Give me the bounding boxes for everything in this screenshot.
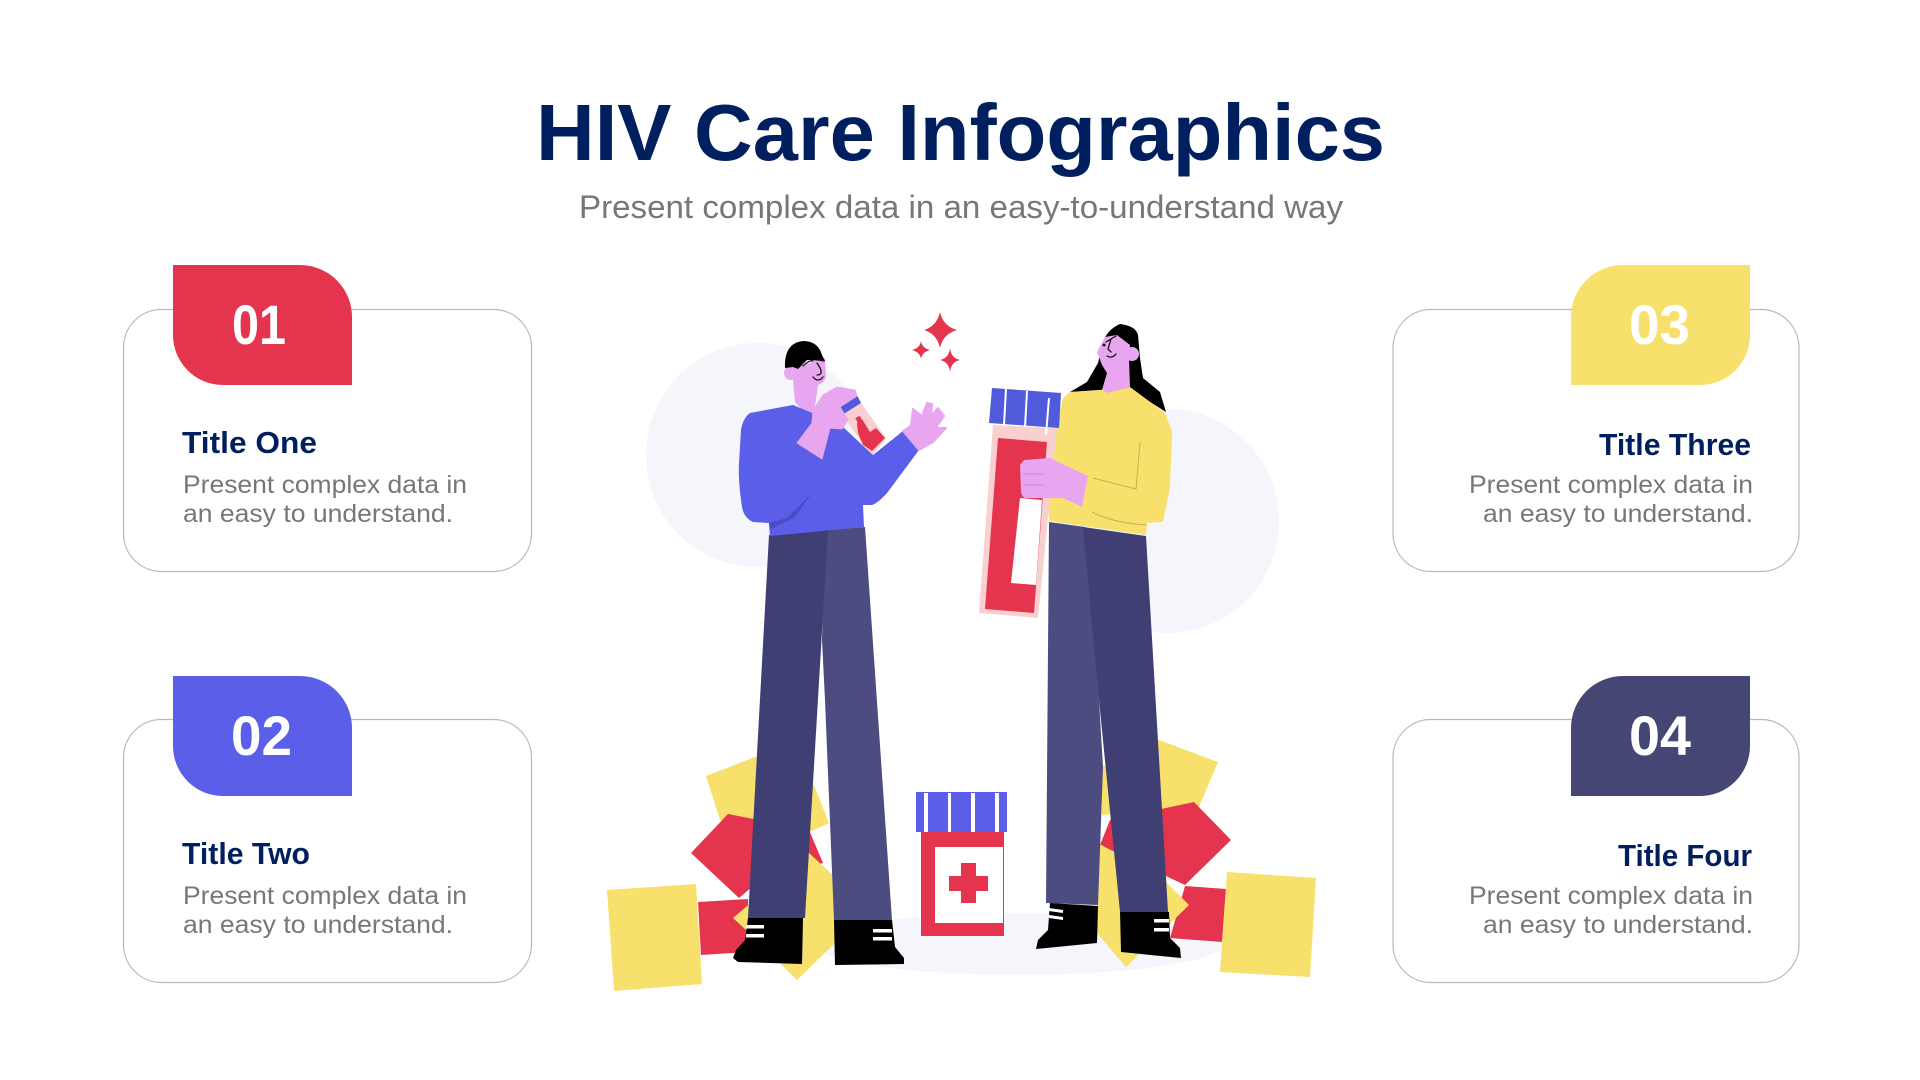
badge 01: [173, 265, 352, 385]
woman figure: [979, 324, 1181, 958]
woman hand finger lines: [1023, 474, 1045, 485]
number 04: 04: [1629, 704, 1691, 767]
woman shoes: [1036, 903, 1181, 958]
man blue sweater: [739, 405, 919, 536]
text block: card four: Present complex data in: [1469, 882, 1753, 910]
badge 04: [1571, 676, 1750, 796]
heading: title three: Title Three: [1599, 427, 1751, 462]
man sweater fold shadow: [769, 493, 812, 530]
woman yellow sweater: [1048, 387, 1172, 535]
text block: card one: an easy to understand.: [183, 500, 453, 528]
heading: title four: Title Four: [1618, 838, 1752, 873]
background blobs: [646, 343, 1279, 975]
man raised hand: [903, 403, 946, 450]
panel: card three: [1393, 265, 1799, 572]
right pile of papers: [1097, 740, 1316, 977]
woman neck and face: [1097, 335, 1139, 393]
heading: title one: Title One: [182, 425, 317, 460]
text block: card one: Present complex data in: [183, 471, 467, 499]
woman hand holding jar: [1020, 458, 1088, 507]
panel: card two: [124, 676, 532, 982]
woman hair: [1070, 324, 1166, 412]
small medicine bottle: [836, 395, 886, 455]
left pile of papers: [607, 757, 835, 991]
panel: card one: [124, 265, 532, 572]
text block: card four: an easy to understand.: [1483, 911, 1753, 939]
man shoes: [733, 918, 904, 965]
number 01: 01: [232, 293, 286, 356]
icon: sparkles: [912, 312, 960, 372]
large medicine jar: [979, 388, 1061, 618]
title: HIV Care Infographics: [536, 88, 1385, 177]
text block: card three: Present complex data in: [1469, 471, 1753, 499]
woman trousers: [1046, 522, 1168, 912]
man drinking hand: [797, 387, 857, 459]
text block: card two: Present complex data in: [183, 882, 467, 910]
heading: title two: Title Two: [182, 836, 310, 871]
subtitle: Present complex data in an easy-to-understand way: [579, 189, 1343, 225]
man trousers: [748, 527, 892, 920]
number 03: 03: [1629, 293, 1690, 356]
woman sweater fold lines: [1092, 442, 1147, 525]
text block: card two: an easy to understand.: [183, 911, 453, 939]
center medicine bottle: [916, 792, 1007, 936]
badge 03: [1571, 265, 1750, 385]
man neck and face: [784, 341, 826, 414]
number 02: 02: [231, 704, 292, 767]
text block: card three: an easy to understand.: [1483, 500, 1753, 528]
panel: card four: [1393, 676, 1799, 982]
illustration: people with medicine: [607, 312, 1316, 991]
man figure: [733, 341, 946, 965]
badge 02: [173, 676, 352, 796]
